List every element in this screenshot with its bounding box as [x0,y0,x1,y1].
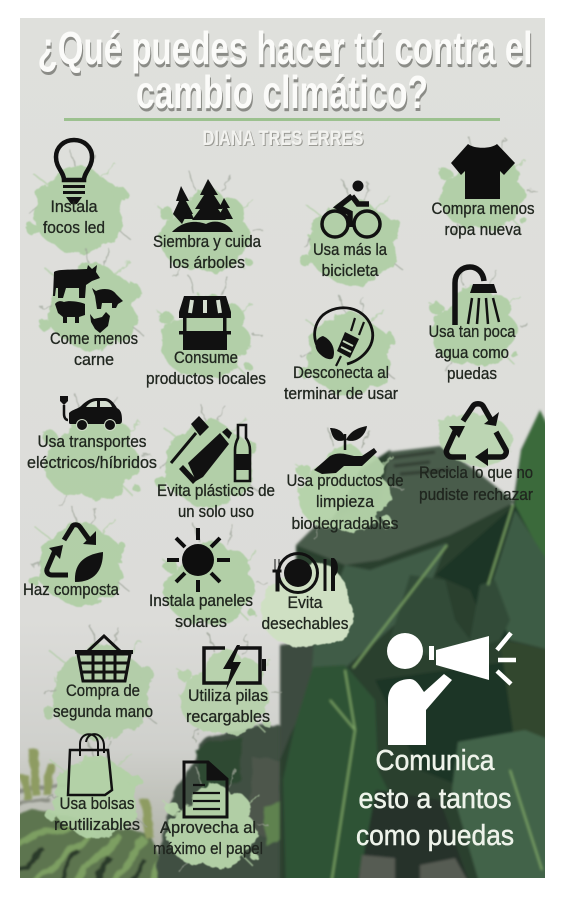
title divider [64,118,500,121]
label: Compra menos [432,199,534,218]
bottom gap [364,790,464,878]
label [313,240,387,280]
leaf: right tip [514,410,545,559]
label: desechables [262,614,348,633]
splat [295,428,403,538]
item: usa transportes electricos [27,393,157,506]
label: puedas [447,364,497,383]
item: usa mas la bicicleta [301,180,404,285]
splat [299,296,398,395]
splat [260,563,353,647]
item: consume productos locales [146,276,266,388]
label: máximo el papel [153,839,263,858]
icon: shopping bag [68,734,112,795]
label: terminar de usar [284,384,398,403]
foliage: bottom right leaves [280,410,550,885]
icon: compost [47,525,103,582]
splat [31,506,130,605]
label: Instala [50,197,98,216]
label [146,348,266,388]
leaf: upper right dark [438,508,516,638]
callout text [356,745,514,852]
label: los árboles [169,253,245,272]
gray stems [20,783,58,806]
label: Recicla lo que no [419,463,533,482]
green patch [262,801,281,846]
leaves layer [280,410,550,885]
label [153,818,263,858]
dark layer [154,722,282,878]
splat [162,523,267,630]
fern layer [20,747,160,878]
icon: trees [172,179,233,232]
splat [177,633,282,740]
icon: market stall [179,296,231,350]
splat [440,414,512,466]
callout text: como puedas [356,820,514,852]
item: compra menos ropa nueva [432,135,536,239]
label: Compra de [66,681,140,700]
icon: document [184,762,227,817]
leaf: upper right lit [492,510,545,650]
green fronds [20,826,158,878]
callout text: esto a tantos [358,783,512,815]
label: Siembra y cuida [153,232,261,251]
label [54,794,140,834]
callout: comunica [356,633,516,852]
label: pudiste rechazar [419,485,533,504]
green patch [195,735,240,790]
label [284,363,398,403]
label [432,199,534,239]
item: siembra y cuida los arboles [153,171,263,278]
leaf: large middle [312,543,447,670]
splat [157,403,260,507]
leaf stripes [390,452,450,474]
label [286,471,404,533]
splat [27,149,130,253]
leaf: big bottom left [283,665,388,885]
label [419,463,533,504]
splat [429,269,529,371]
icon: t-shirt [451,144,515,199]
splat [438,135,536,235]
label: Usa bolsas [60,794,134,813]
leaf: left gray [280,640,314,760]
label: bicicleta [322,261,379,280]
icon: plate and cutlery [273,554,338,592]
olive fronds [24,748,150,838]
splat [158,276,263,383]
label: segunda mano [53,702,153,721]
icon: cyclist [322,180,380,237]
splat [46,739,145,838]
splat [44,626,158,739]
label [186,686,270,726]
label [149,591,253,631]
item: usa tan poca agua [428,267,529,383]
icon: plug and leaf [315,308,373,366]
label: Utiliza pilas [188,686,268,705]
label: reutilizables [54,815,140,834]
label: Consume [174,348,238,367]
icon: hand holding plant [314,426,377,474]
label [53,681,153,721]
label: recargables [186,707,270,726]
label: Evita plásticos de [157,481,275,500]
title: cambio climático? [136,66,428,118]
label: eléctricos/híbridos [27,453,157,472]
item: haz composta [23,506,130,605]
icon: recycle arrows [446,404,506,466]
label: productos locales [146,369,266,388]
label: Evita [288,593,323,612]
label [153,232,261,272]
label: Usa más la [313,240,387,259]
dark fronds [20,846,147,878]
label: Usa productos de [286,471,404,490]
label [43,197,105,237]
label [50,329,138,369]
item: utiliza pilas recargables [177,633,282,740]
foliage base [280,410,550,885]
splat [164,766,269,873]
icon: toothbrush, tube and bottle [171,416,250,484]
label: solares [175,612,227,631]
leaf: heart centre [390,575,510,660]
icon: battery [204,645,266,690]
label: Desconecta al [293,363,389,382]
author: DIANA TRES ERRES [202,127,364,150]
right edge lit [502,659,522,732]
item: evita plasticos de un solo uso [157,403,275,521]
leaf patch [249,758,280,836]
splat [41,246,144,350]
item: instala focos led [27,140,130,253]
gap gray patches [358,854,468,878]
label [428,322,516,383]
dark leaf mass [154,722,282,878]
label: Instala paneles [149,591,253,610]
label: focos led [43,218,105,237]
icon: basket [75,636,133,681]
label: carne [74,350,114,369]
item: usa bolsas reutilizables [46,734,145,838]
item: compra de segunda mano [44,626,158,739]
label: Haz composta [23,580,119,599]
label: Usa tan poca [428,322,516,341]
item: recicla [419,404,533,504]
item: come menos carne [41,246,144,369]
label [262,593,348,633]
leaf: upper gray striped [296,446,515,565]
icon: shower [455,267,499,325]
label [157,481,275,521]
title [38,22,532,118]
splat [158,171,263,278]
fern base [20,808,159,878]
leaf: lower right [452,730,550,885]
foliage: dark mass behind paper icon [154,722,282,878]
item: aprovecha el papel [153,762,269,873]
label [27,432,157,472]
label: Usa transportes [38,432,146,451]
label: Come menos [50,329,138,348]
label: limpieza [316,492,375,511]
icon: person with megaphone [387,633,516,745]
leaf veins [330,505,542,885]
icon: electric car [60,396,122,430]
label: un solo uso [178,502,254,521]
item: evita desechables [260,554,353,647]
item: productos de limpieza biodegradables [286,426,404,538]
icon: light bulb [56,140,92,204]
icon: sun [167,528,230,592]
item: desconecta al terminar de usar [284,296,398,403]
foliage: bottom left ferns [20,747,160,878]
label: Aprovecha al [160,818,256,837]
item: instala paneles solares [149,523,267,631]
callout text: Comunica [376,745,495,777]
splat [301,181,404,285]
label: agua como [435,343,509,362]
label: biodegradables [292,514,398,533]
centre dark [378,664,512,782]
label: ropa nueva [444,220,522,239]
icon: farm animals [53,265,123,333]
splat [41,393,151,506]
